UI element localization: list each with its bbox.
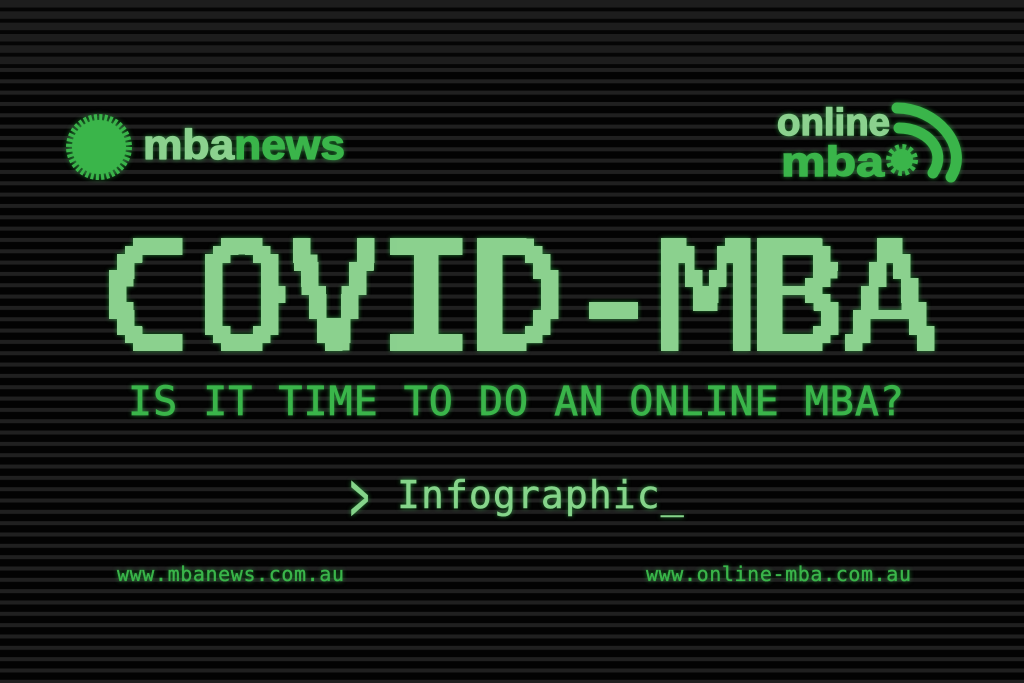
subtitle: IS IT TIME TO DO AN ONLINE MBA? [128, 379, 904, 425]
logo: online mba [777, 102, 956, 185]
logo: mbanews [70, 118, 345, 176]
icon: small sunburst [889, 147, 915, 173]
prompt: infographic [350, 455, 685, 539]
logo text: online: online [777, 102, 890, 144]
prompt word: Infographic_ [397, 473, 685, 518]
icon: mbanews sunburst badge [70, 118, 128, 176]
prompt chevron: > [350, 455, 369, 539]
logo wordmark: mbanews [143, 121, 345, 168]
url: online-mba: www.online-mba.com.au [646, 562, 911, 586]
icon: signal arcs [897, 108, 956, 177]
url: mbanews: www.mbanews.com.au [117, 562, 344, 586]
title: COVID-MBA [101, 211, 938, 385]
logo text: mba: mba [781, 138, 885, 185]
